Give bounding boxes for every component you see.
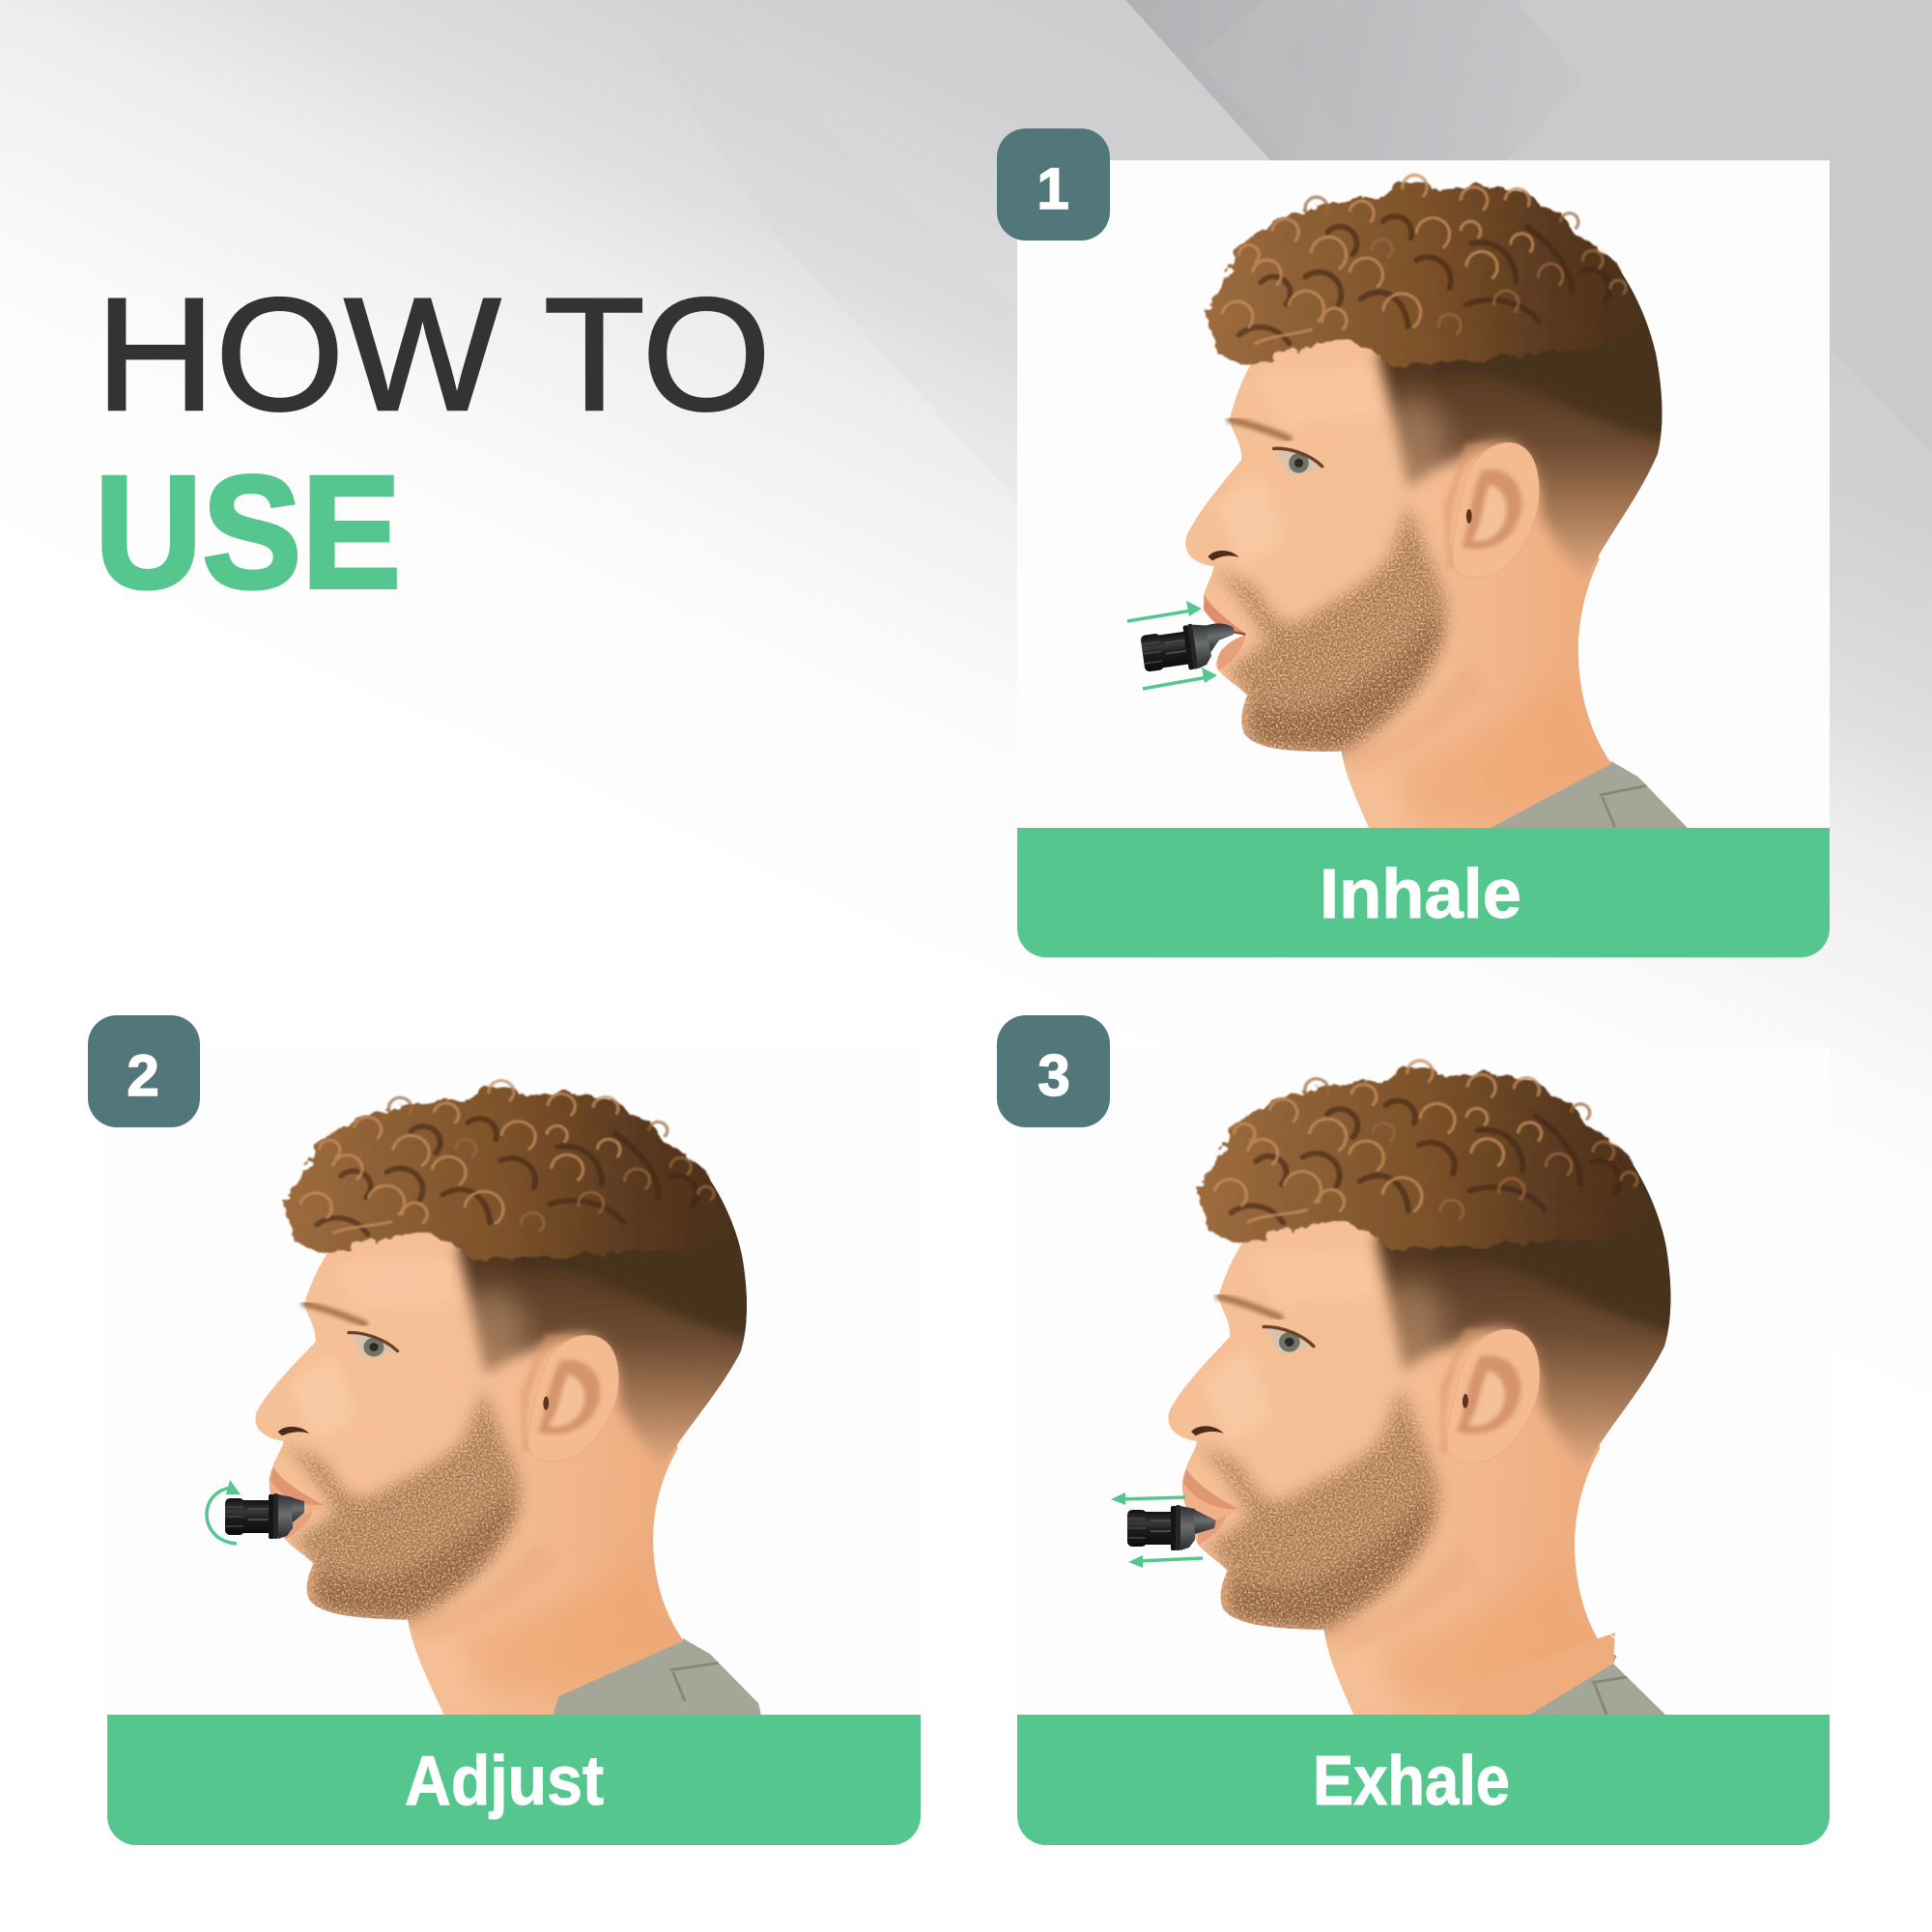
photo: man adjusting device [255,1078,761,1715]
heading: how to: HOW TO [96,266,771,444]
panel: step 1 inhale [997,128,1830,957]
photo: man exhaling through device [1168,1058,1671,1715]
label bar: inhale [1017,828,1830,957]
arrow: rotate [207,1480,241,1544]
label bar: inhale: Inhale [1320,856,1521,933]
badge: 3 [997,1015,1110,1127]
label bar: exhale [1017,1715,1830,1845]
badge: 1: 1 [1037,156,1069,221]
panel: step 3 exhale [997,1015,1830,1845]
photo background [1017,160,1830,829]
arrows: inhale [1127,601,1217,689]
panel: step 2 adjust [88,1015,921,1845]
label bar: adjust [107,1715,921,1845]
badge: 1 [997,128,1110,241]
title [95,266,771,622]
photo: man inhaling through device [1185,172,1687,828]
icon: breathing device [225,1493,304,1539]
heading: use: USE [95,443,401,622]
icon: breathing device [1140,618,1238,676]
photo background [1017,1047,1830,1716]
photo background [107,1047,921,1716]
icon: breathing device [1127,1505,1216,1550]
label bar: adjust: Adjust [405,1743,604,1820]
badge: 3: 3 [1037,1043,1070,1108]
arrows: exhale [1111,1492,1203,1568]
badge: 2 [88,1015,200,1127]
label bar: exhale: Exhale [1313,1743,1510,1820]
badge: 2: 2 [127,1043,159,1108]
